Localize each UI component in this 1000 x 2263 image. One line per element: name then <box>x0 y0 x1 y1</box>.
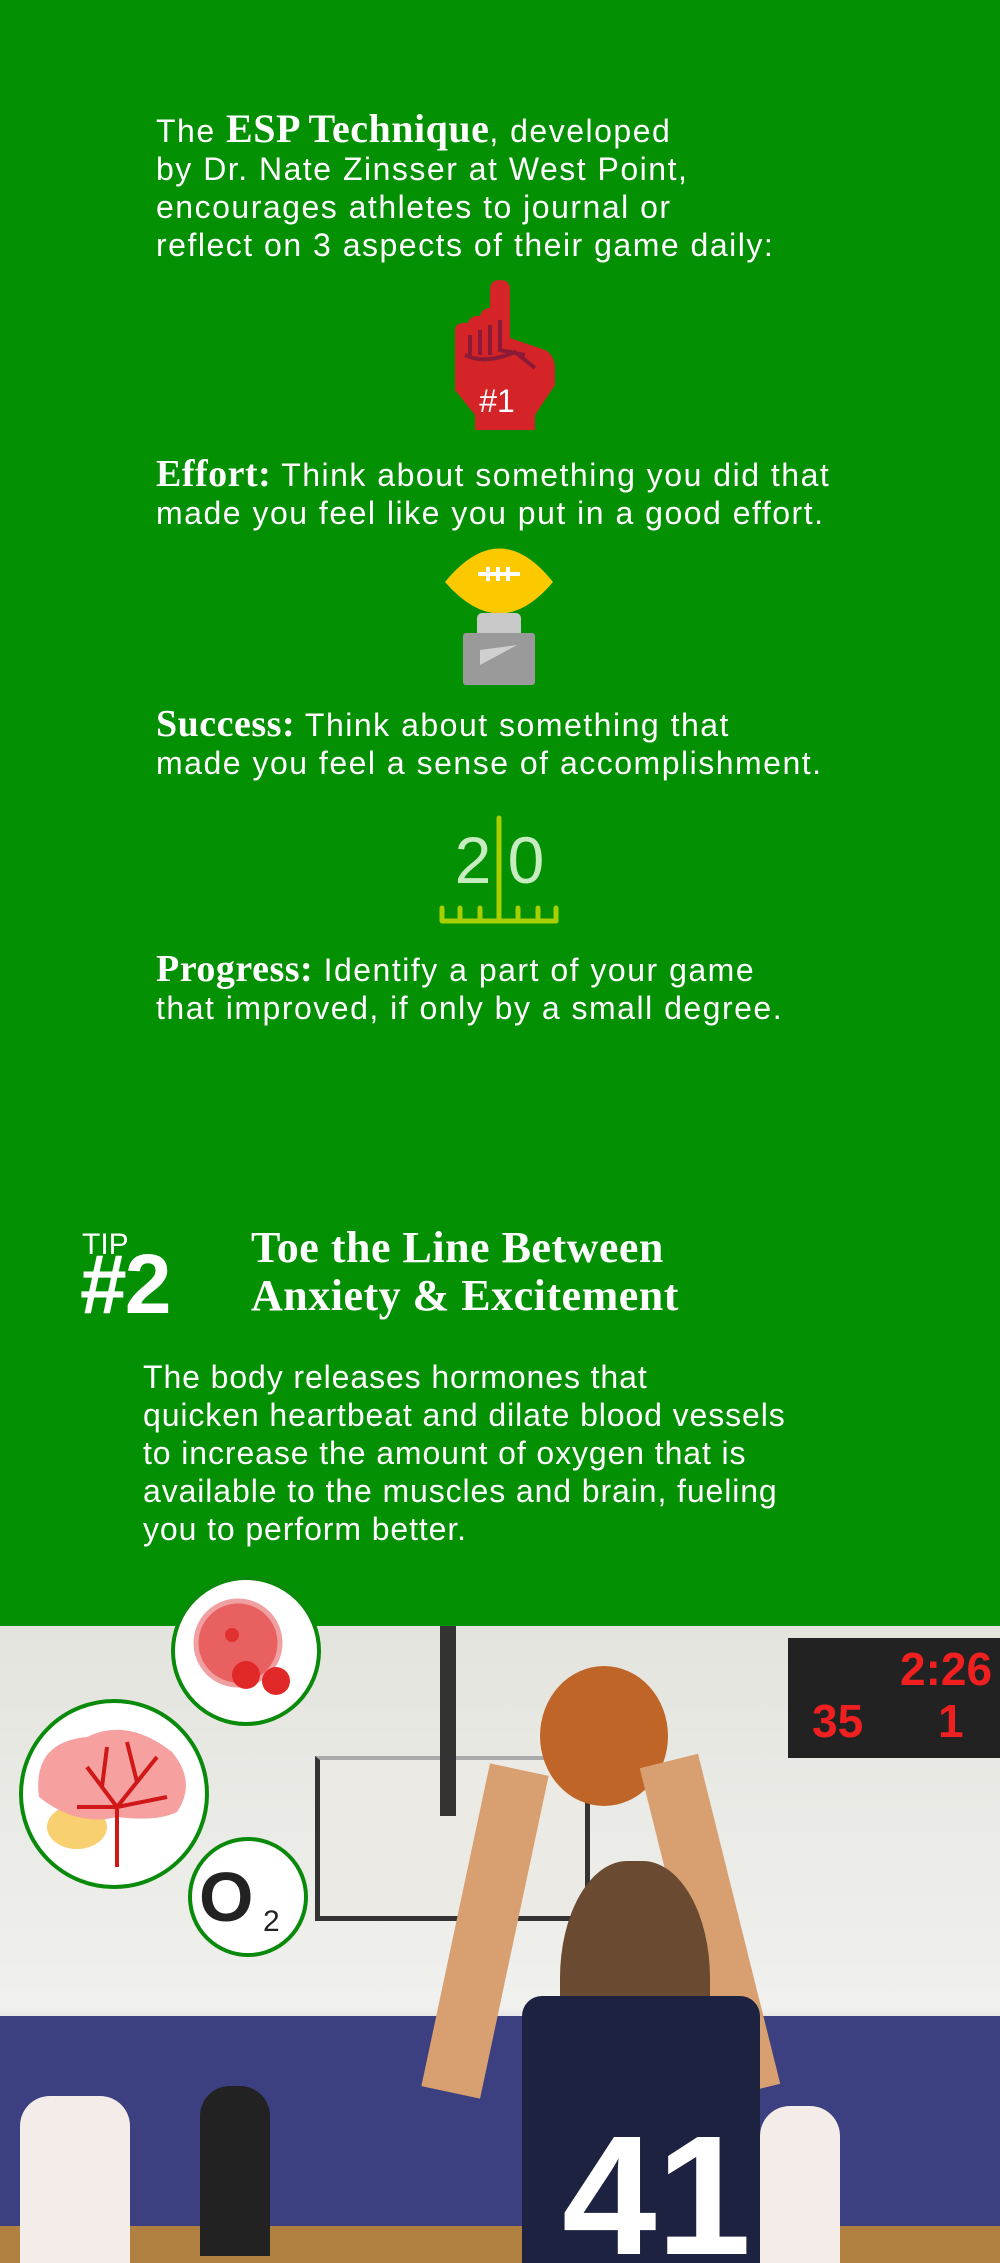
body text: available to the muscles and brain, fueling <box>143 1473 778 1509</box>
icon: yard line 20 <box>440 816 558 924</box>
effort text: Effort: Think about something you did that <box>156 453 830 495</box>
player <box>540 1666 668 1806</box>
icon: foam finger #1: #1 <box>479 383 515 419</box>
body text: quicken heartbeat and dilate blood vessels <box>143 1397 786 1433</box>
intro text: encourages athletes to journal or <box>156 189 672 225</box>
scoreboard: 2:26 <box>900 1643 992 1695</box>
success text <box>156 703 823 781</box>
intro text: The ESP Technique, developed <box>156 106 671 151</box>
body text: you to perform better. <box>143 1511 467 1547</box>
tip number: #2 <box>80 1237 169 1331</box>
progress text: Progress: Identify a part of your game <box>156 948 755 990</box>
intro text: by Dr. Nate Zinsser at West Point, <box>156 151 688 187</box>
intro text <box>156 106 774 263</box>
icon: yard line 20: 2 <box>455 823 491 897</box>
icon: O2: O <box>199 1858 253 1936</box>
scoreboard: 1 <box>938 1695 964 1747</box>
scoreboard <box>788 1638 1000 1758</box>
background players <box>20 2096 130 2263</box>
icon: foam finger #1 <box>455 280 555 430</box>
progress text: that improved, if only by a small degree. <box>156 990 783 1026</box>
body text: The body releases hormones that <box>143 1359 648 1395</box>
progress text <box>156 948 783 1026</box>
scoreboard: 35 <box>812 1695 863 1747</box>
icon: O2 <box>188 1837 308 1957</box>
tip heading: Toe the Line Between <box>251 1223 664 1272</box>
tip heading <box>251 1223 679 1320</box>
icon: red blood cells <box>171 1580 321 1726</box>
body text: to increase the amount of oxygen that is <box>143 1435 746 1471</box>
icon: football trophy <box>445 548 553 685</box>
photo: basketball player <box>0 1626 1000 2263</box>
tip heading: Anxiety & Excitement <box>251 1271 679 1320</box>
icon: yard line 20: 0 <box>508 823 544 897</box>
tip number: TIP <box>82 1228 129 1261</box>
success text: made you feel a sense of accomplishment. <box>156 745 823 781</box>
success text: Success: Think about something that <box>156 703 730 745</box>
intro text: reflect on 3 aspects of their game daily: <box>156 227 774 263</box>
body text <box>143 1359 786 1547</box>
effort text <box>156 453 830 531</box>
icon: O2: 2 <box>263 1905 280 1938</box>
icon: brain <box>19 1699 209 1889</box>
effort text: made you feel like you put in a good effort. <box>156 495 824 531</box>
